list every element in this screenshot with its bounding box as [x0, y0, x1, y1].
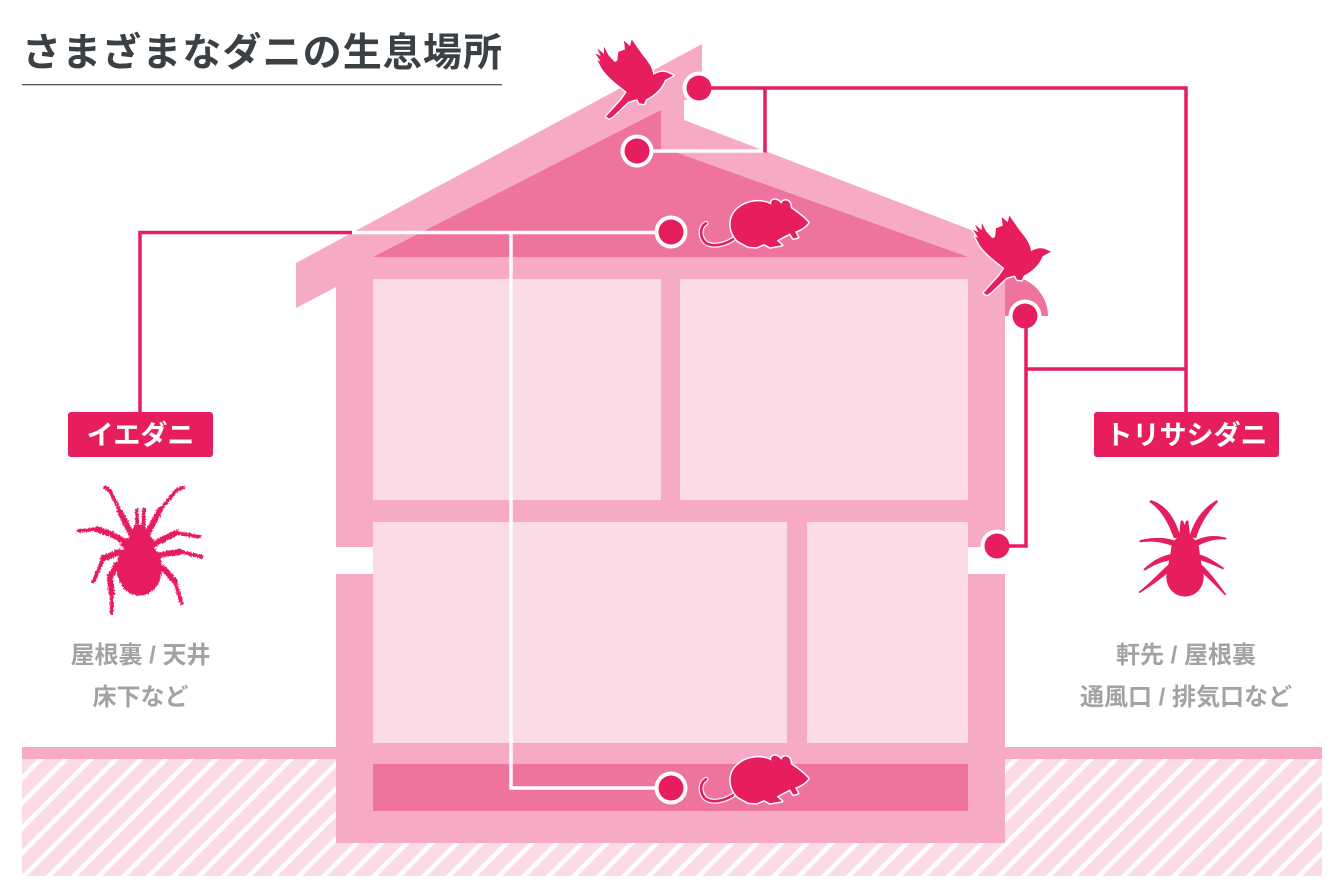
icon: トリサシダニ mite: [1138, 500, 1227, 597]
room lower left: [373, 522, 787, 743]
label: イエダニ: [68, 412, 213, 457]
marker: wall vent: [984, 534, 1010, 558]
marker dots: [624, 76, 1038, 800]
text: トリサシダニ habitats: 軒先 / 屋根裏: [1116, 641, 1256, 669]
text: トリサシダニ habitats: [1080, 641, 1292, 711]
label: トリサシダニ: [1094, 412, 1279, 457]
room lower right: [807, 522, 968, 743]
house: [296, 44, 1005, 843]
marker: roof ridge: [686, 76, 712, 100]
crawl space: [373, 764, 968, 811]
marker: eaves vent: [1012, 304, 1038, 328]
house outline: [296, 44, 1005, 843]
marker: roof eaves: [624, 138, 650, 164]
bird on eaves: [973, 216, 1051, 295]
text: トリサシダニ habitats: 通風口 / 排気口など: [1080, 684, 1292, 711]
marker: attic: [658, 220, 684, 244]
marker: crawl space: [658, 776, 684, 800]
mouse in crawl space: [701, 756, 808, 803]
room upper right: [680, 279, 968, 500]
label: トリサシダニ: トリサシダニ: [1106, 420, 1268, 450]
bird on roof peak: [595, 39, 673, 119]
left vent gap: [336, 547, 373, 574]
text: イエダニ habitats: [70, 641, 211, 711]
right vent gap: [968, 547, 1005, 574]
icon: イエダニ mite: [78, 487, 202, 613]
text: イエダニ habitats: 屋根裏 / 天井: [70, 641, 211, 669]
marker rings: [620, 72, 1042, 804]
label: イエダニ: イエダニ: [87, 420, 194, 450]
connector lines: イエダニ: [140, 232, 671, 788]
room upper left: [373, 279, 661, 500]
ground: [22, 747, 1322, 876]
text: イエダニ habitats: 床下など: [92, 684, 188, 711]
eaves vent arc: [1005, 276, 1048, 316]
title: さまざまなダニの生息場所: [22, 31, 502, 75]
connector lines: トリサシダニ: [637, 88, 1186, 546]
mouse in attic: [701, 200, 808, 247]
attic: [373, 110, 968, 257]
